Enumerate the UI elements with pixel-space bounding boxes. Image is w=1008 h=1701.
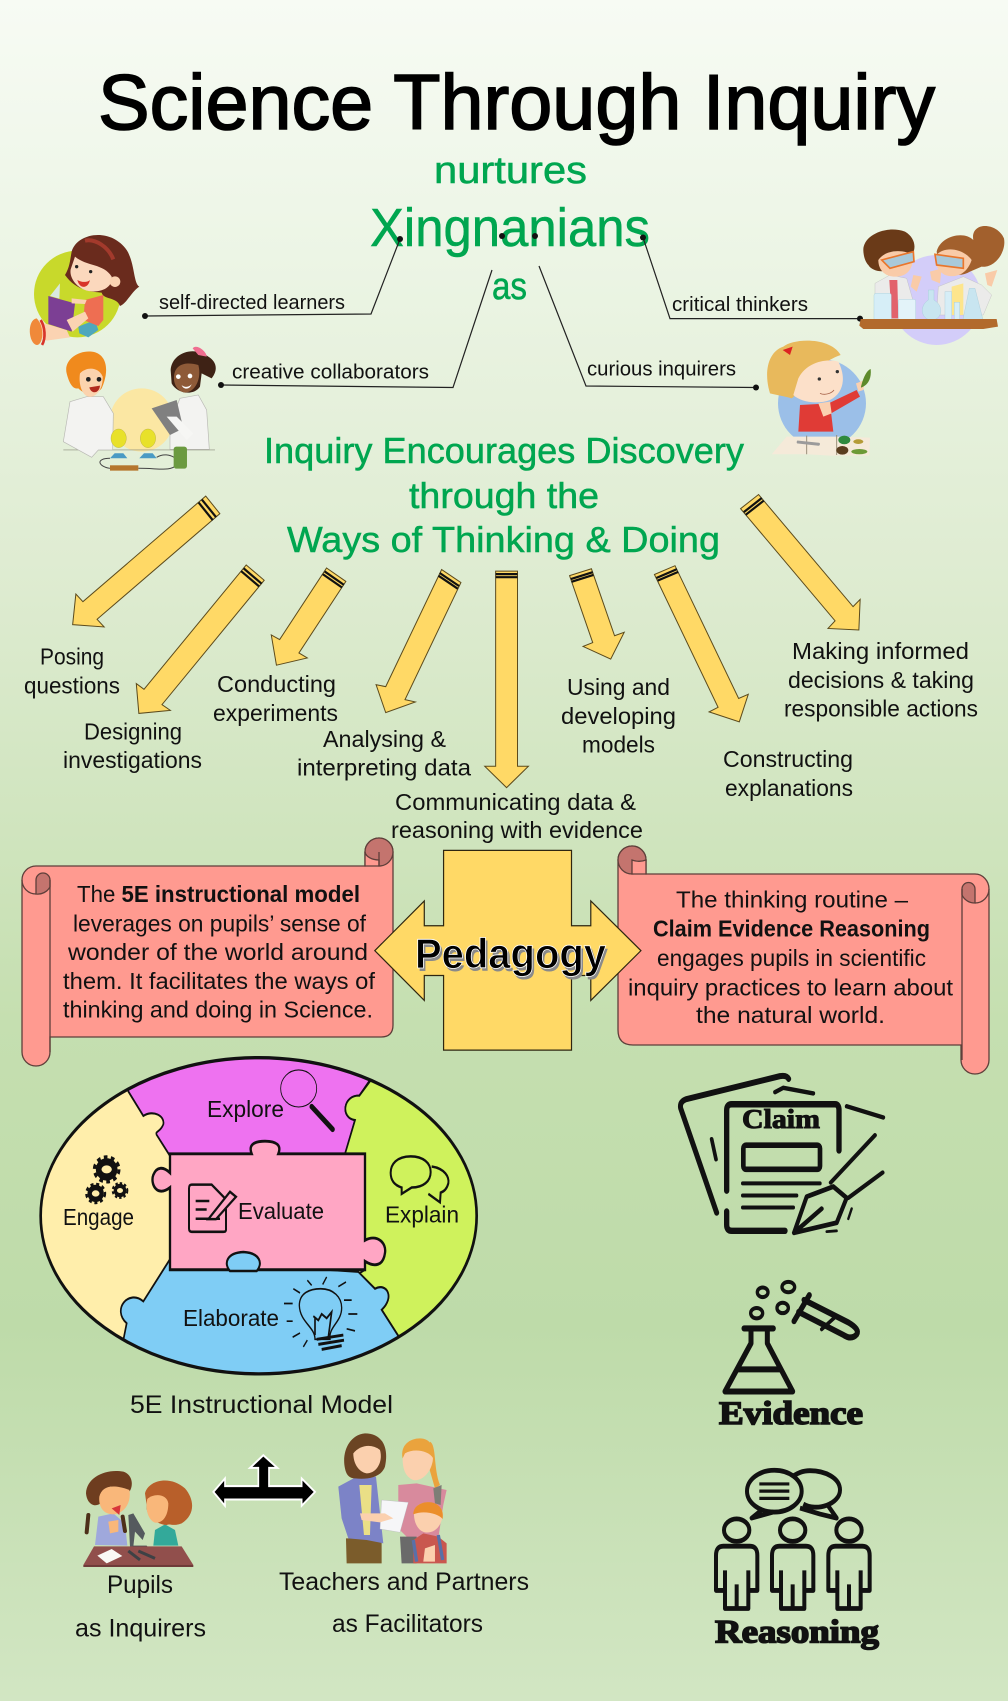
label: Analysing and interpreting data	[297, 726, 471, 780]
icon: two pupils with goggles and flasks	[859, 226, 1004, 345]
subheading: as: as	[492, 266, 527, 308]
label: Conducting experiments: experiments	[213, 700, 338, 726]
caption: Teachers and Partners as Facilitators: Teachers and Partners	[279, 1568, 529, 1596]
heading: Pedagogy: Pedagogy	[417, 933, 609, 980]
caption: 5E Instructional Model: 5E Instructional Model	[130, 1391, 393, 1419]
label: Constructing explanations	[723, 746, 853, 801]
text: Claim Evidence Reasoning description: engages pupils in scientific	[657, 945, 926, 971]
icon: claim document and pen	[680, 1076, 883, 1233]
heading: Inquiry Encourages Discovery: Inquiry Encourages Discovery	[264, 430, 744, 471]
label: Conducting experiments	[213, 671, 338, 726]
icon: document with pencil	[189, 1185, 236, 1232]
label: Communicating data and reasoning with evidence: reasoning with evidence	[391, 817, 643, 843]
label: Constructing explanations: explanations	[725, 775, 853, 801]
connector lines: learner attributes	[142, 233, 863, 390]
label: Posing questions: questions	[24, 672, 120, 698]
puzzle label: Engage: Engage	[63, 1204, 134, 1230]
icon: flask and test tube	[725, 1282, 857, 1392]
puzzle label: Evaluate: Evaluate	[238, 1198, 324, 1224]
arrow: connection between pupils and teachers	[213, 1455, 315, 1506]
caption: Pupils as Inquirers: as Inquirers	[75, 1614, 206, 1642]
icon: two pupils with bulbs and circuit	[63, 347, 216, 471]
caption: Teachers and Partners as Facilitators	[279, 1568, 529, 1638]
caption: Pupils as Inquirers: Pupils	[107, 1571, 173, 1599]
subheading: nurtures: nurtures	[434, 150, 587, 192]
label: Designing investigations: investigations	[63, 747, 202, 773]
icon: three people with speech bubbles	[716, 1470, 870, 1608]
label: critical thinkers: critical thinkers	[672, 294, 808, 316]
text: 5E instructional model description: wonder of the world around	[67, 939, 368, 965]
label: Designing investigations: Designing	[84, 718, 182, 744]
title: Science Through Inquiry	[98, 58, 935, 146]
label: Making informed decisions: Making informed	[792, 638, 969, 664]
text: 5E instructional model description: The 5E instructional model	[77, 881, 360, 907]
caption: Pupils as Inquirers	[75, 1571, 206, 1642]
heading: Ways of Thinking & Doing: Ways of Thinking & Doing	[287, 519, 720, 560]
label: Reasoning: Reasoning	[715, 1614, 880, 1650]
puzzle label: Explore: Explore	[207, 1096, 284, 1122]
heading: Pedagogy: Pedagogy	[415, 930, 607, 977]
label: creative collaborators: creative collaborators	[232, 362, 429, 384]
icon: speech bubbles	[391, 1156, 448, 1202]
label: Using and developing models: developing	[561, 703, 676, 729]
icon: teacher and pupils	[338, 1433, 447, 1563]
puzzle piece: Elaborate	[120, 1259, 399, 1372]
icon: light bulb	[284, 1277, 357, 1349]
icon: magnifying glass	[281, 1070, 333, 1129]
caption: Teachers and Partners as Facilitators: as Facilitators	[332, 1610, 483, 1638]
label: curious inquirers: curious inquirers	[587, 358, 736, 380]
panel: scroll 5E instructional model	[22, 838, 393, 1066]
icon: girl holding a leaf	[767, 341, 871, 456]
label: Analysing and interpreting data: Analysing &	[323, 726, 446, 752]
text: Claim Evidence Reasoning description: the natural world.	[696, 1002, 885, 1028]
puzzle piece: Evaluate	[152, 1141, 385, 1270]
chart: 5E puzzle ellipse	[39, 1056, 478, 1376]
text: 5E instructional model description: them. It facilitates the ways of	[63, 968, 376, 994]
puzzle label: Elaborate: Elaborate	[183, 1305, 279, 1331]
label: Designing investigations	[63, 718, 202, 773]
panel: scroll Claim Evidence Reasoning	[618, 846, 989, 1074]
label: Using and developing models	[561, 674, 676, 758]
icon: pupils with microscope	[83, 1471, 193, 1567]
puzzle piece: Explore	[128, 1059, 369, 1156]
panel: Pedagogy cross arrow	[375, 850, 641, 1050]
label: Analysing and interpreting data: interpreting data	[297, 754, 471, 780]
label: Making informed decisions	[784, 638, 978, 722]
puzzle piece: Explain	[344, 1082, 476, 1335]
label: Making informed decisions: responsible actions	[784, 696, 978, 722]
puzzle knob: Elaborate into Evaluate	[227, 1252, 260, 1271]
text: Claim Evidence Reasoning description: The thinking routine –	[676, 886, 908, 912]
icon: girl reading a book	[30, 235, 139, 345]
text: 5E instructional model description: thinking and doing in Science.	[63, 996, 373, 1022]
text: 5E instructional model description	[63, 881, 376, 1022]
label: Posing questions	[24, 644, 120, 698]
text: Claim Evidence Reasoning description	[628, 886, 954, 1028]
label: Posing questions: Posing	[40, 644, 104, 670]
label: Evidence: Evidence	[719, 1396, 863, 1432]
label: Conducting experiments: Conducting	[217, 671, 336, 697]
label: Communicating data and reasoning with evidence: Communicating data &	[395, 789, 636, 815]
label: Using and developing models: models	[582, 732, 655, 758]
label: Making informed decisions: decisions & taking	[788, 667, 974, 693]
icon: gears	[86, 1157, 127, 1203]
text: Claim Evidence Reasoning description: Claim Evidence Reasoning	[653, 916, 930, 942]
text: 5E instructional model description: leverages on pupils’ sense of	[73, 910, 367, 936]
text: Claim Evidence Reasoning description: inquiry practices to learn about	[628, 974, 954, 1000]
label: self-directed learners: self-directed learners	[159, 292, 345, 314]
label: Using and developing models: Using and	[567, 674, 670, 700]
label: Claim: Claim	[742, 1104, 821, 1134]
arrows: ways of thinking and doing	[73, 495, 860, 788]
puzzle label: Explain: Explain	[385, 1202, 459, 1228]
label: Communicating data and reasoning with evidence	[391, 789, 643, 843]
subheading: Xingnanians: Xingnanians	[370, 198, 650, 258]
heading: through the: through the	[409, 475, 599, 516]
label: Constructing explanations: Constructing	[723, 746, 853, 772]
